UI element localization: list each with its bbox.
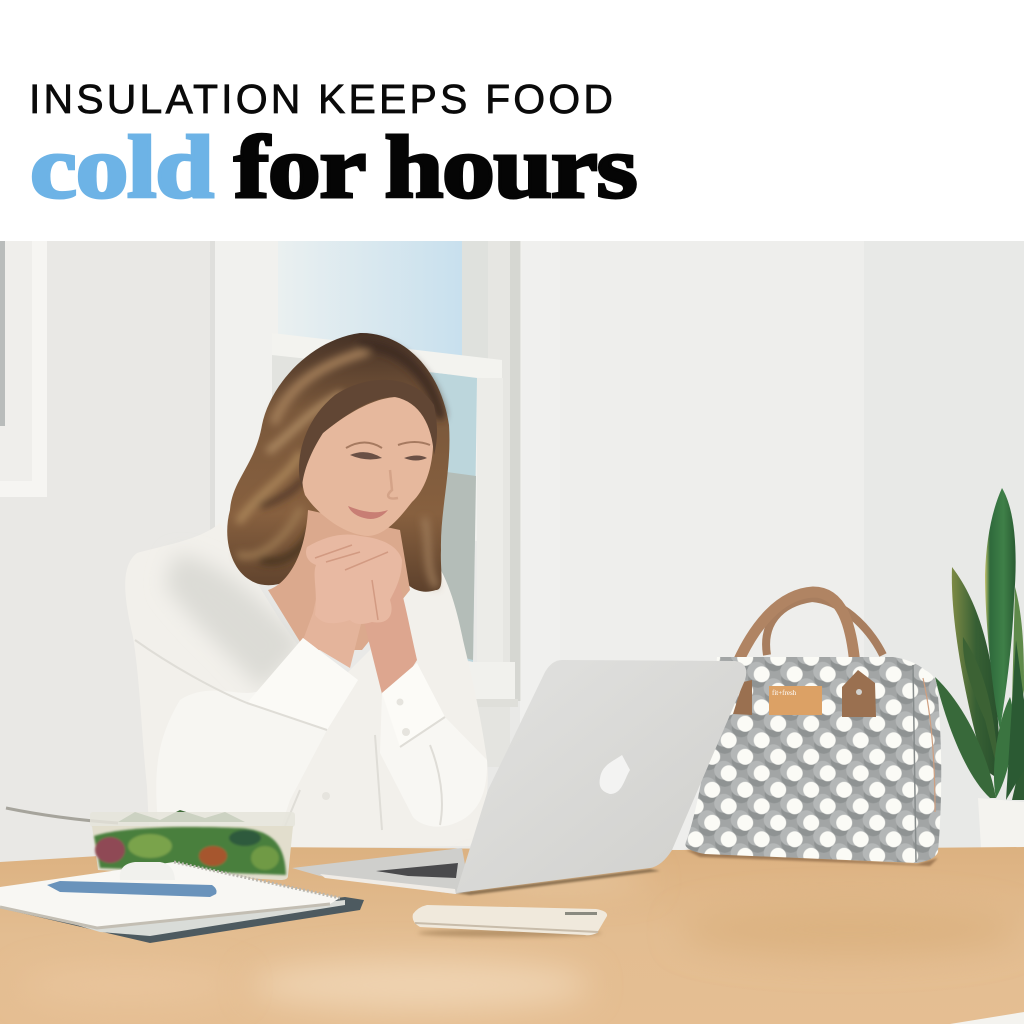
- notebook: [0, 862, 364, 943]
- right cuff and sleeve: [380, 663, 487, 827]
- bag body: [685, 657, 941, 863]
- bag label: [769, 686, 822, 715]
- wall: [0, 241, 1024, 881]
- bag side panel: [913, 665, 916, 862]
- left forearm: [303, 580, 362, 668]
- plant: [935, 488, 1024, 800]
- right forearm: [363, 580, 417, 694]
- eraser: [120, 862, 175, 880]
- bag label: fit+fresh: [772, 689, 797, 697]
- hair highlights: [240, 345, 440, 585]
- photo: woman at desk with lunch bag: [0, 241, 1024, 1024]
- heading line: cold for hours: cold for hours: [30, 119, 636, 217]
- bag handles: [766, 598, 883, 655]
- phone: [413, 905, 607, 937]
- hands: [306, 534, 402, 624]
- bag handle tabs: [733, 680, 752, 715]
- sleeve shading: [165, 555, 305, 690]
- eyes and mouth: [346, 442, 430, 519]
- apple logo: [600, 755, 630, 794]
- heading: [0, 0, 1024, 241]
- buttons: [322, 698, 410, 800]
- picture frame: [0, 241, 47, 497]
- woman: [125, 333, 488, 850]
- salad container: [6, 808, 295, 880]
- laptop: [292, 660, 746, 895]
- lunch bag: [685, 592, 941, 866]
- face: [302, 397, 433, 536]
- hair: [227, 333, 449, 592]
- window: [210, 241, 522, 767]
- left cuff and sleeve: [156, 638, 358, 845]
- pen: [47, 881, 216, 897]
- pot: [978, 798, 1024, 852]
- neck and chest: [268, 510, 410, 650]
- heading line: insulation keeps food: INSULATION KEEPS FOOD: [29, 76, 616, 122]
- blouse: [125, 523, 488, 850]
- table: [0, 847, 1024, 1024]
- hair front strand: [299, 380, 437, 488]
